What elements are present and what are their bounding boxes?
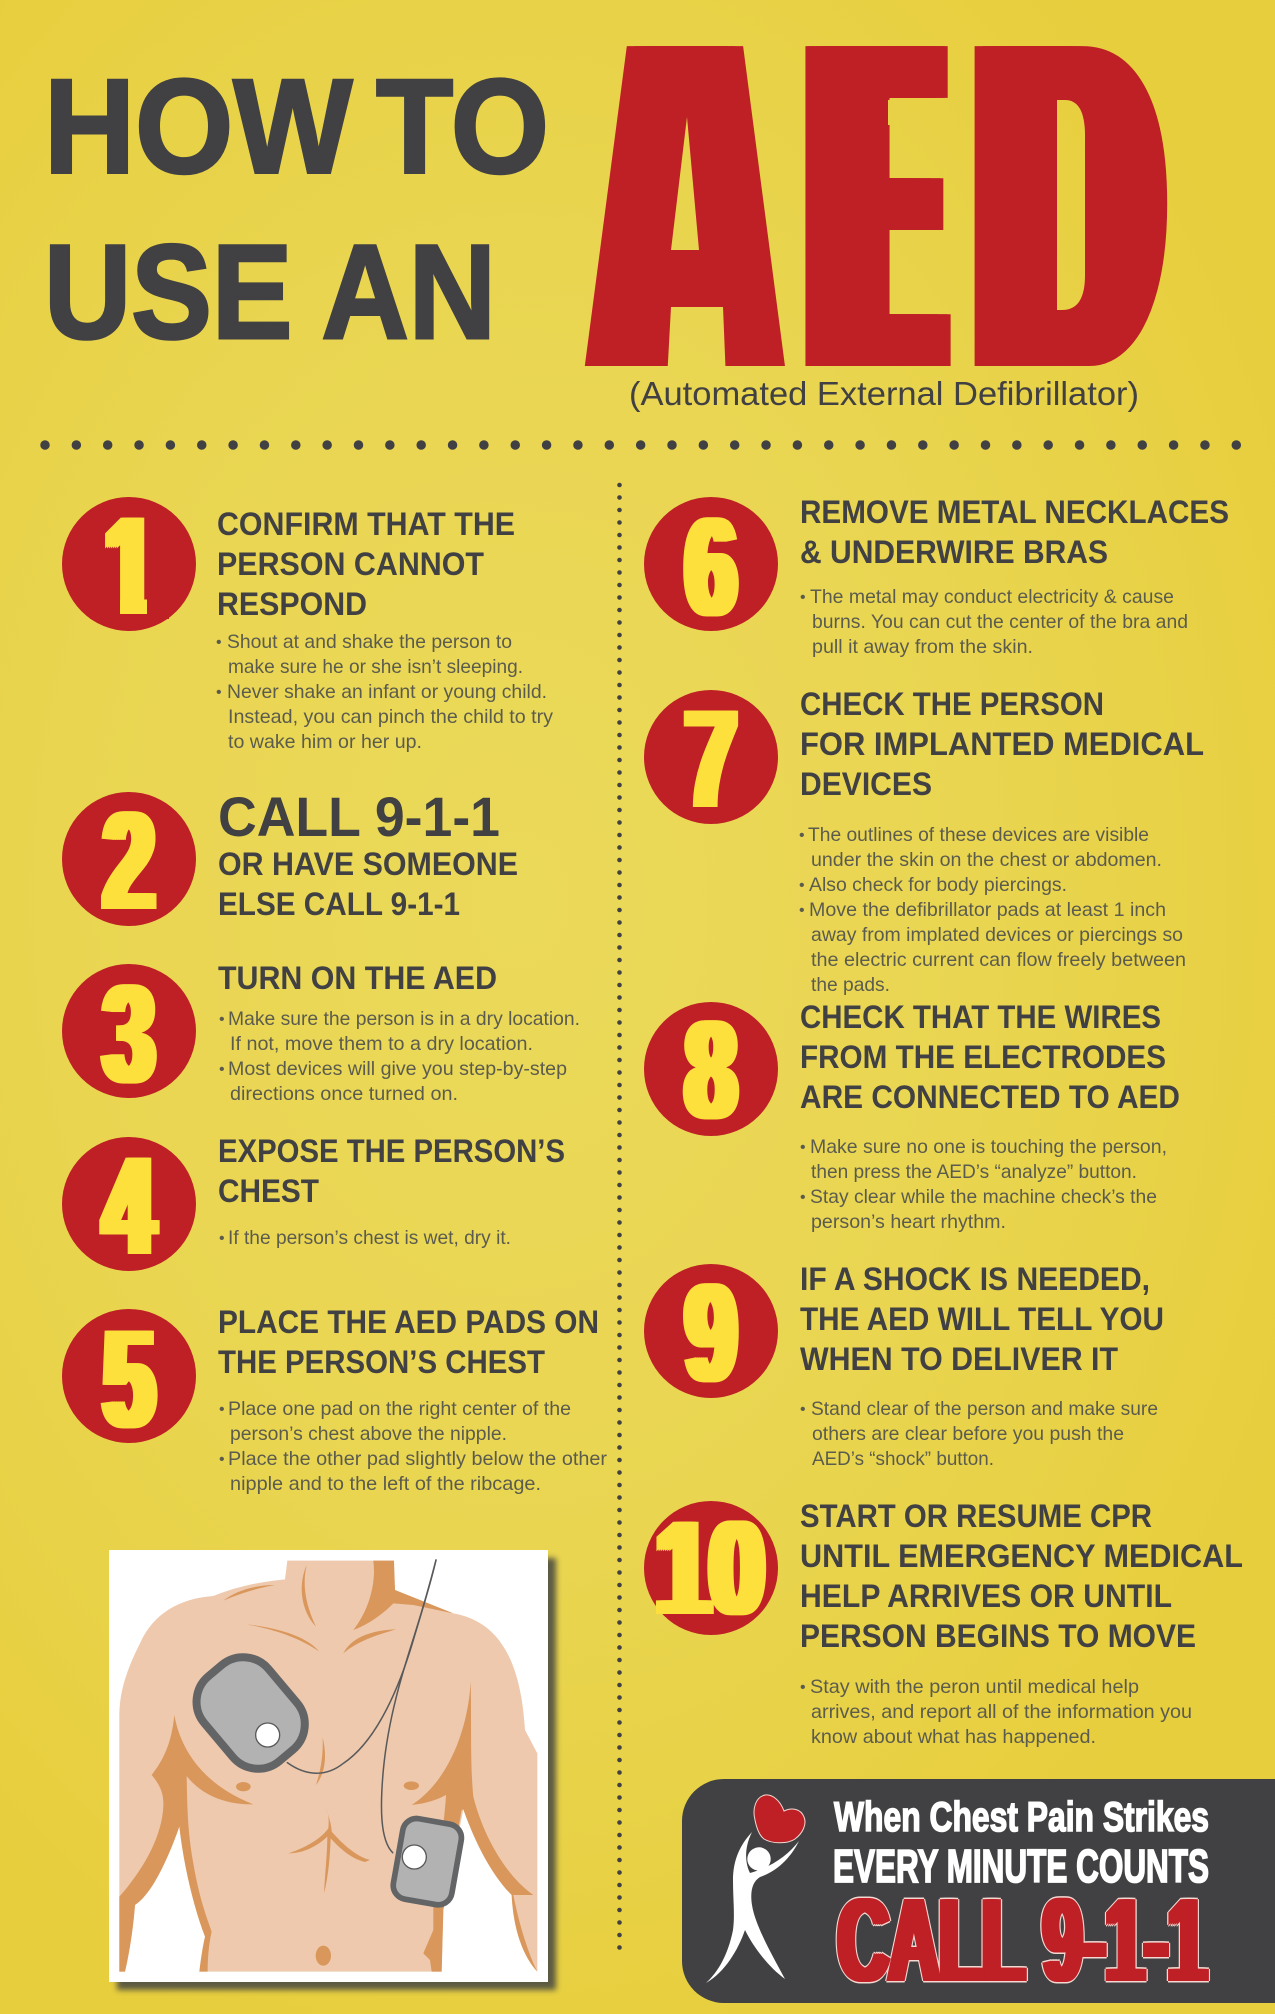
step 8 text: then press the AED’s “analyze” button. (811, 1161, 1137, 1183)
pad upper (183, 1644, 318, 1782)
step 10 text (800, 1498, 1243, 1748)
step 6 text: REMOVE METAL NECKLACES (800, 494, 1229, 530)
step 8 text: • (800, 1139, 806, 1156)
step 1 text: • (216, 684, 222, 701)
number badge 9: 9 (686, 1254, 736, 1410)
step 7 text: FOR IMPLANTED MEDICAL (800, 726, 1204, 762)
step 6 text: • (800, 589, 806, 606)
step 9 text: • (800, 1401, 806, 1418)
step 7 text: away from implated devices or piercings so (811, 924, 1183, 946)
number badge 5 (62, 1309, 196, 1443)
step 3 text: TURN ON THE AED (218, 960, 497, 996)
step 6 text: burns. You can cut the center of the bra and (812, 611, 1188, 633)
banner: chest pain call 9-1-1 (682, 1779, 1275, 2003)
step 7 text: • (799, 902, 805, 919)
step 8 text: FROM THE ELECTRODES (800, 1039, 1166, 1075)
step 7 text: Move the defibrillator pads at least 1 inch (809, 899, 1166, 921)
number badge 10: 10 (656, 1494, 764, 1642)
icon: person lifting heart (706, 1795, 805, 1983)
step 8 text: ARE CONNECTED TO AED (800, 1079, 1180, 1115)
step 1 text: CONFIRM THAT THE (217, 506, 515, 542)
step 1 text: to wake him or her up. (228, 731, 422, 753)
step 5 text: nipple and to the left of the ribcage. (230, 1473, 541, 1495)
step 5 text: • (219, 1451, 225, 1468)
step 5 text: THE PERSON’S CHEST (218, 1344, 545, 1380)
step 3 text (218, 960, 580, 1105)
step 8 text (800, 999, 1180, 1233)
step 3 text: Most devices will give you step-by-step (228, 1058, 567, 1080)
step 7 text: under the skin on the chest or abdomen. (811, 849, 1162, 871)
step 4 text: CHEST (218, 1173, 319, 1209)
number badge 9 (644, 1264, 778, 1398)
title: how to use an: HOW TO (44, 52, 549, 202)
step 1 text: Instead, you can pinch the child to try (228, 706, 553, 728)
number badge 8: 8 (686, 990, 736, 1148)
banner: call 9-1-1: CALL 9-1-1 (838, 1874, 1207, 2007)
step 6 text: pull it away from the skin. (812, 636, 1033, 658)
step 10 text: START OR RESUME CPR (800, 1498, 1152, 1534)
step 10 text: PERSON BEGINS TO MOVE (800, 1618, 1196, 1654)
step 9 text: Stand clear of the person and make sure (811, 1398, 1158, 1420)
number badge 7 (644, 690, 778, 824)
number badge 2 (62, 792, 196, 926)
step 7 text: CHECK THE PERSON (800, 686, 1104, 722)
step 8 text: Make sure no one is touching the person, (810, 1136, 1167, 1158)
step 2 text: OR HAVE SOMEONE (218, 846, 518, 882)
illustration: chest with AED pads (109, 1550, 556, 1990)
step 7 text (799, 686, 1204, 996)
step 6 text (800, 494, 1229, 658)
step 5 text: person’s chest above the nipple. (230, 1423, 507, 1445)
step 6 text: & UNDERWIRE BRAS (800, 534, 1108, 570)
number badge 1 (62, 497, 196, 631)
step 8 text: person’s heart rhythm. (811, 1211, 1006, 1233)
step 9 text: others are clear before you push the (812, 1423, 1124, 1445)
torso silhouette (119, 1561, 537, 1972)
step 7 text: • (799, 877, 805, 894)
step 7 text: the pads. (811, 974, 890, 996)
number badge 5: 5 (104, 1300, 154, 1456)
step 1 text (216, 506, 553, 753)
step 1 text: Never shake an infant or young child. (227, 681, 547, 703)
step 4 text (218, 1133, 565, 1249)
step 1 text: make sure he or she isn’t sleeping. (228, 656, 523, 678)
banner slogan (833, 1793, 1209, 1892)
title: how to use an: USE AN (44, 218, 496, 367)
step 2 text (218, 785, 518, 922)
number badge 4: 4 (104, 1126, 154, 1284)
step 2 text: ELSE CALL 9-1-1 (218, 886, 460, 922)
step 5 text: PLACE THE AED PADS ON (218, 1304, 599, 1340)
step 7 text: the electric current can flow freely between (811, 949, 1186, 971)
step 7 text: • (799, 827, 805, 844)
step 7 text: The outlines of these devices are visible (808, 824, 1149, 846)
title: AED (584, 46, 1168, 366)
step 7 text: DEVICES (800, 766, 932, 802)
step 10 text: • (800, 1679, 806, 1696)
number badge 2: 2 (104, 782, 154, 938)
step 1 text: Shout at and shake the person to (227, 631, 512, 653)
number badge 7: 7 (686, 680, 736, 836)
number badge 6 (644, 497, 778, 631)
number badge 4 (62, 1137, 196, 1271)
step 2 text: CALL 9-1-1 (218, 785, 500, 848)
number badge 3: 3 (104, 954, 154, 1112)
number badge 1: 1 (105, 486, 155, 644)
step 3 text: • (219, 1011, 225, 1028)
step 10 text: Stay with the peron until medical help (810, 1676, 1139, 1698)
step 5 text: Place one pad on the right center of the (228, 1398, 571, 1420)
step 3 text: If not, move them to a dry location. (230, 1033, 533, 1055)
step 9 text: AED’s “shock” button. (812, 1448, 994, 1470)
step 9 text: WHEN TO DELIVER IT (800, 1341, 1118, 1377)
step 1 text: • (216, 634, 222, 651)
step 4 text: If the person’s chest is wet, dry it. (228, 1227, 511, 1249)
step 1 text: RESPOND (217, 586, 367, 622)
step 6 text: The metal may conduct electricity & cause (810, 586, 1174, 608)
step 8 text: CHECK THAT THE WIRES (800, 999, 1161, 1035)
number badge 6: 6 (686, 488, 736, 644)
subtitle: automated external defibrillator: (Automated External Defibrillator) (629, 375, 1139, 412)
step 1 text: PERSON CANNOT (217, 546, 484, 582)
step 5 text: Place the other pad slightly below the other (228, 1448, 608, 1470)
step 3 text: • (219, 1061, 225, 1078)
step 4 text: EXPOSE THE PERSON’S (218, 1133, 565, 1169)
step 8 text: • (800, 1189, 806, 1206)
number badge 3 (62, 964, 196, 1098)
step 9 text (800, 1261, 1164, 1470)
step 9 text: THE AED WILL TELL YOU (800, 1301, 1164, 1337)
step 5 text: • (219, 1401, 225, 1418)
pad lower (391, 1816, 464, 1907)
muscle shading (119, 1561, 537, 1972)
step 10 text: arrives, and report all of the information you (811, 1701, 1192, 1723)
step 5 text (218, 1304, 608, 1495)
step 8 text: Stay clear while the machine check’s the (810, 1186, 1157, 1208)
step 10 text: know about what has happened. (811, 1726, 1096, 1748)
step 7 text: Also check for body piercings. (809, 874, 1067, 896)
step 9 text: IF A SHOCK IS NEEDED, (800, 1261, 1150, 1297)
step 10 text: HELP ARRIVES OR UNTIL (800, 1578, 1172, 1614)
step 10 text: UNTIL EMERGENCY MEDICAL (800, 1538, 1243, 1574)
number badge 8 (644, 1002, 778, 1136)
step 4 text: • (219, 1230, 225, 1247)
title: how to use an (44, 52, 549, 367)
step 3 text: Make sure the person is in a dry location. (228, 1008, 580, 1030)
step 3 text: directions once turned on. (230, 1083, 458, 1105)
wires (287, 1560, 436, 1853)
